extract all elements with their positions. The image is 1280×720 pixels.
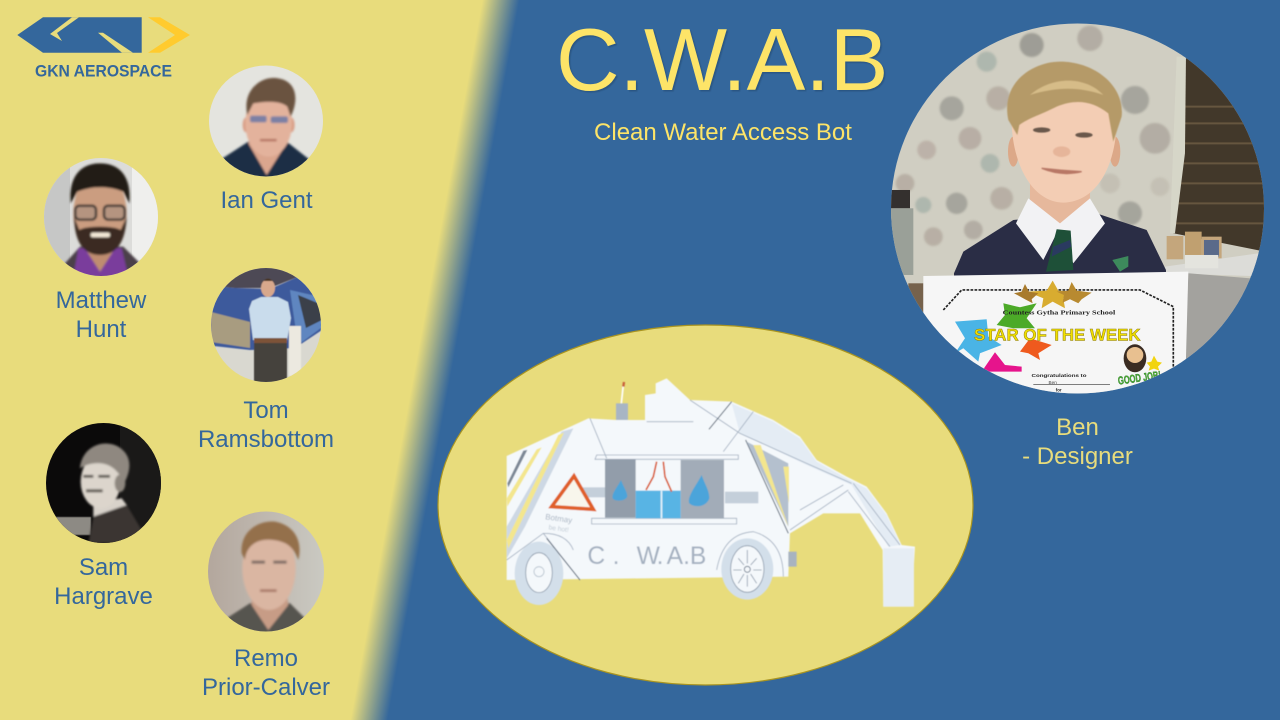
front wheel [721, 538, 773, 600]
team member: Tom Ramsbottom [198, 265, 334, 453]
mouth [1042, 168, 1082, 174]
tie [1046, 229, 1073, 272]
jumper [954, 213, 1166, 280]
team member: Sam Hargrave [40, 420, 165, 610]
vehicle drawing: C.W.A.B robot: be hot! [548, 524, 569, 534]
team member: Matthew Hunt [44, 158, 158, 337]
name: Sam Hargrave [54, 554, 153, 610]
warning triangle [552, 476, 593, 509]
portrait: Matthew Hunt [44, 158, 158, 276]
caption: Ben - Designer: Ben [1056, 414, 1099, 441]
window sill and frames [1165, 253, 1258, 276]
chassis sketch lines [507, 400, 900, 580]
arm shading [732, 403, 901, 547]
logo: GKN Aerospace: GKN AEROSPACE [35, 62, 172, 81]
name: Tom Ramsbottom [198, 397, 334, 453]
name: Sam Hargrave: Sam [79, 554, 128, 581]
portrait: Ben with certificate: for [1056, 387, 1062, 392]
name: Sam Hargrave: Hargrave [54, 583, 153, 610]
portrait: Sam Hargrave [46, 423, 161, 543]
name: Remo Prior-Calver [202, 645, 330, 701]
portrait: Ben with certificate: STAR OF THE WEEK [974, 326, 1141, 345]
portrait: Ben with certificate: Congratulations to [1031, 373, 1087, 378]
name on vehicle: C.W.A.B [587, 543, 706, 570]
certificate [923, 272, 1188, 395]
mast and sensor [616, 403, 628, 420]
portrait: Tom Ramsbottom [211, 268, 321, 382]
team member: Remo Prior-Calver [202, 508, 330, 701]
name: Matthew Hunt: Hunt [76, 316, 127, 343]
caption: Ben - Designer [1022, 414, 1133, 470]
name: Tom Ramsbottom: Tom [243, 397, 289, 424]
rear bucket [883, 548, 914, 607]
face [1008, 137, 1019, 167]
collar [1016, 198, 1105, 263]
certificate text: Countess Gytha Primary School [1003, 311, 1116, 317]
stars [1029, 280, 1065, 308]
name: Ian Gent: Ian Gent [220, 187, 313, 214]
side bars [582, 487, 607, 497]
panel: vehicle drawing oval [438, 325, 973, 685]
portrait: Ben with certificate [885, 20, 1273, 400]
orange lines in window [646, 462, 672, 492]
name: Remo Prior-Calver: Prior-Calver [202, 674, 330, 701]
team member: Ian Gent [209, 66, 323, 208]
water drops [613, 480, 627, 501]
subtitle: Clean Water Access Bot [594, 119, 852, 146]
eyes [1033, 127, 1050, 133]
window panels [605, 459, 636, 518]
name: Matthew Hunt [56, 287, 147, 343]
hair [1007, 62, 1122, 142]
portrait: Ben with certificate: GOOD JOB! [1117, 370, 1162, 388]
name: Tom Ramsbottom: Ramsbottom [198, 426, 334, 453]
left hazard stripes [507, 428, 573, 558]
sofa [1186, 273, 1250, 360]
cartoon face [1124, 344, 1146, 372]
neck [1030, 184, 1090, 224]
portrait: Ben with certificate: Ben [1049, 380, 1057, 385]
title: C.W.A.B [556, 10, 888, 109]
caption: Ben - Designer: - Designer [1022, 443, 1133, 470]
title: C.W.A.B [558, 12, 890, 110]
logo: GKN Aerospace [17, 17, 190, 81]
name: Remo Prior-Calver: Remo [234, 645, 298, 672]
portrait: Ian Gent [209, 66, 323, 176]
vehicle body [507, 378, 915, 607]
vehicle drawing: C.W.A.B robot [507, 378, 915, 607]
portrait: Remo Prior-Calver [208, 512, 324, 632]
rear wheel [515, 542, 563, 605]
badge [1112, 256, 1128, 272]
nose [1053, 146, 1070, 157]
name: Matthew Hunt: Matthew [56, 287, 147, 314]
window blinds [1173, 58, 1264, 250]
right hazard stripes [747, 442, 788, 527]
wallpaper flowers [896, 26, 1170, 246]
warning text: Botmay [545, 512, 573, 525]
left dark shelf [890, 190, 910, 208]
